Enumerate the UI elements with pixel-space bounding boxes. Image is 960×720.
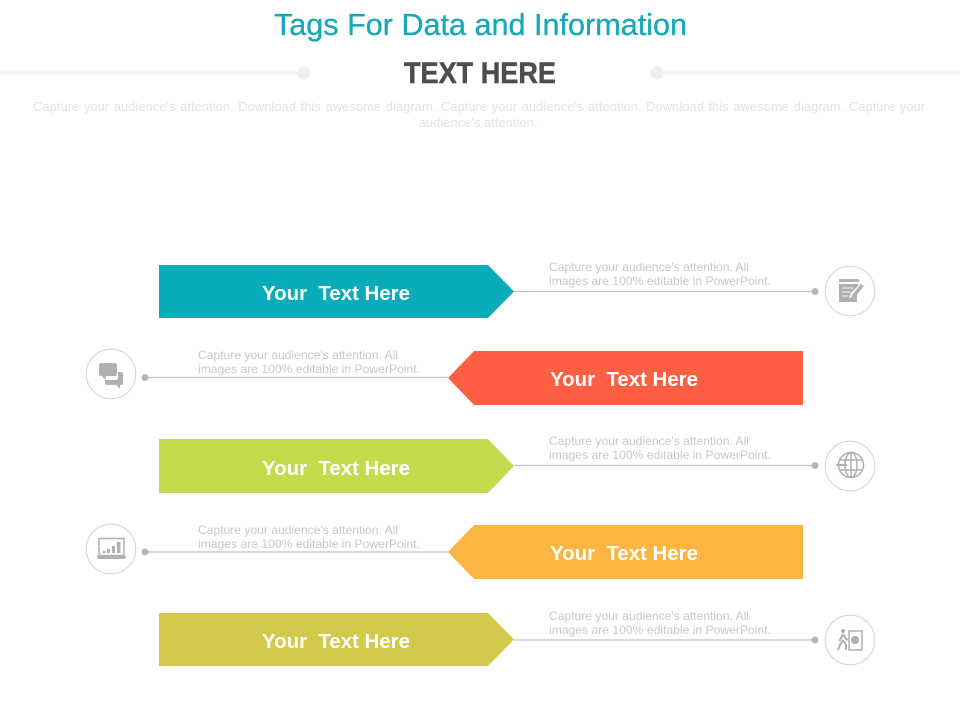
tag 1: Your Text Here [262,283,410,305]
tag 4: Your Text Here [550,543,698,565]
caption 4: Capture your audience's attention. All [198,523,398,537]
connector 1 [514,288,818,295]
caption 2 [198,348,420,376]
subheading: TEXT HERE [404,57,556,90]
icon: person and safe door [825,615,875,665]
row 2 [86,348,803,405]
caption 2: images are 100% editable in PowerPoint. [198,362,420,376]
icon: globe [825,441,875,491]
connector 4 [142,548,448,556]
caption 5: images are 100% editable in PowerPoint. [549,623,771,637]
tag 5 [159,613,514,666]
tag 2 [448,351,803,405]
row 3 [159,434,875,493]
caption 4: images are 100% editable in PowerPoint. [198,537,420,551]
icon: speech bubbles [86,349,136,399]
caption 1: images are 100% editable in PowerPoint. [549,274,771,288]
caption 1: Capture your audience's attention. All [549,260,749,274]
caption 3: images are 100% editable in PowerPoint. [549,448,771,462]
intro text block: audience's attention. [419,115,537,130]
row 1 [159,260,875,318]
caption 2: Capture your audience's attention. All [198,348,398,362]
connector 2 [142,374,448,381]
icon: notepad and pencil [825,266,875,316]
caption 1 [549,260,771,288]
left header rule [0,66,310,80]
caption 3 [549,434,771,462]
caption 4 [198,523,420,551]
row 5 [159,609,875,666]
tag 2: Your Text Here [550,369,698,391]
tag 5: Your Text Here [262,631,410,653]
title: Tags For Data and Information [274,7,687,42]
icon: laptop with bar chart [86,524,136,574]
tag 1 [159,265,514,318]
tag 3: Your Text Here [262,458,410,480]
connector 5 [514,636,818,644]
row 4 [86,523,803,579]
tag 4 [448,525,803,579]
tag 3 [159,439,514,493]
caption 5: Capture your audience's attention. All [549,609,749,623]
caption 5 [549,609,771,637]
right header rule [650,66,960,80]
intro text block [33,99,925,133]
intro text block: Capture your audience's attention. Download this awesome diagram. Capture your audience's attention. Download this awesome diagram. Capture your [33,99,925,114]
connector 3 [514,462,818,469]
caption 3: Capture your audience's attention. All [549,434,749,448]
